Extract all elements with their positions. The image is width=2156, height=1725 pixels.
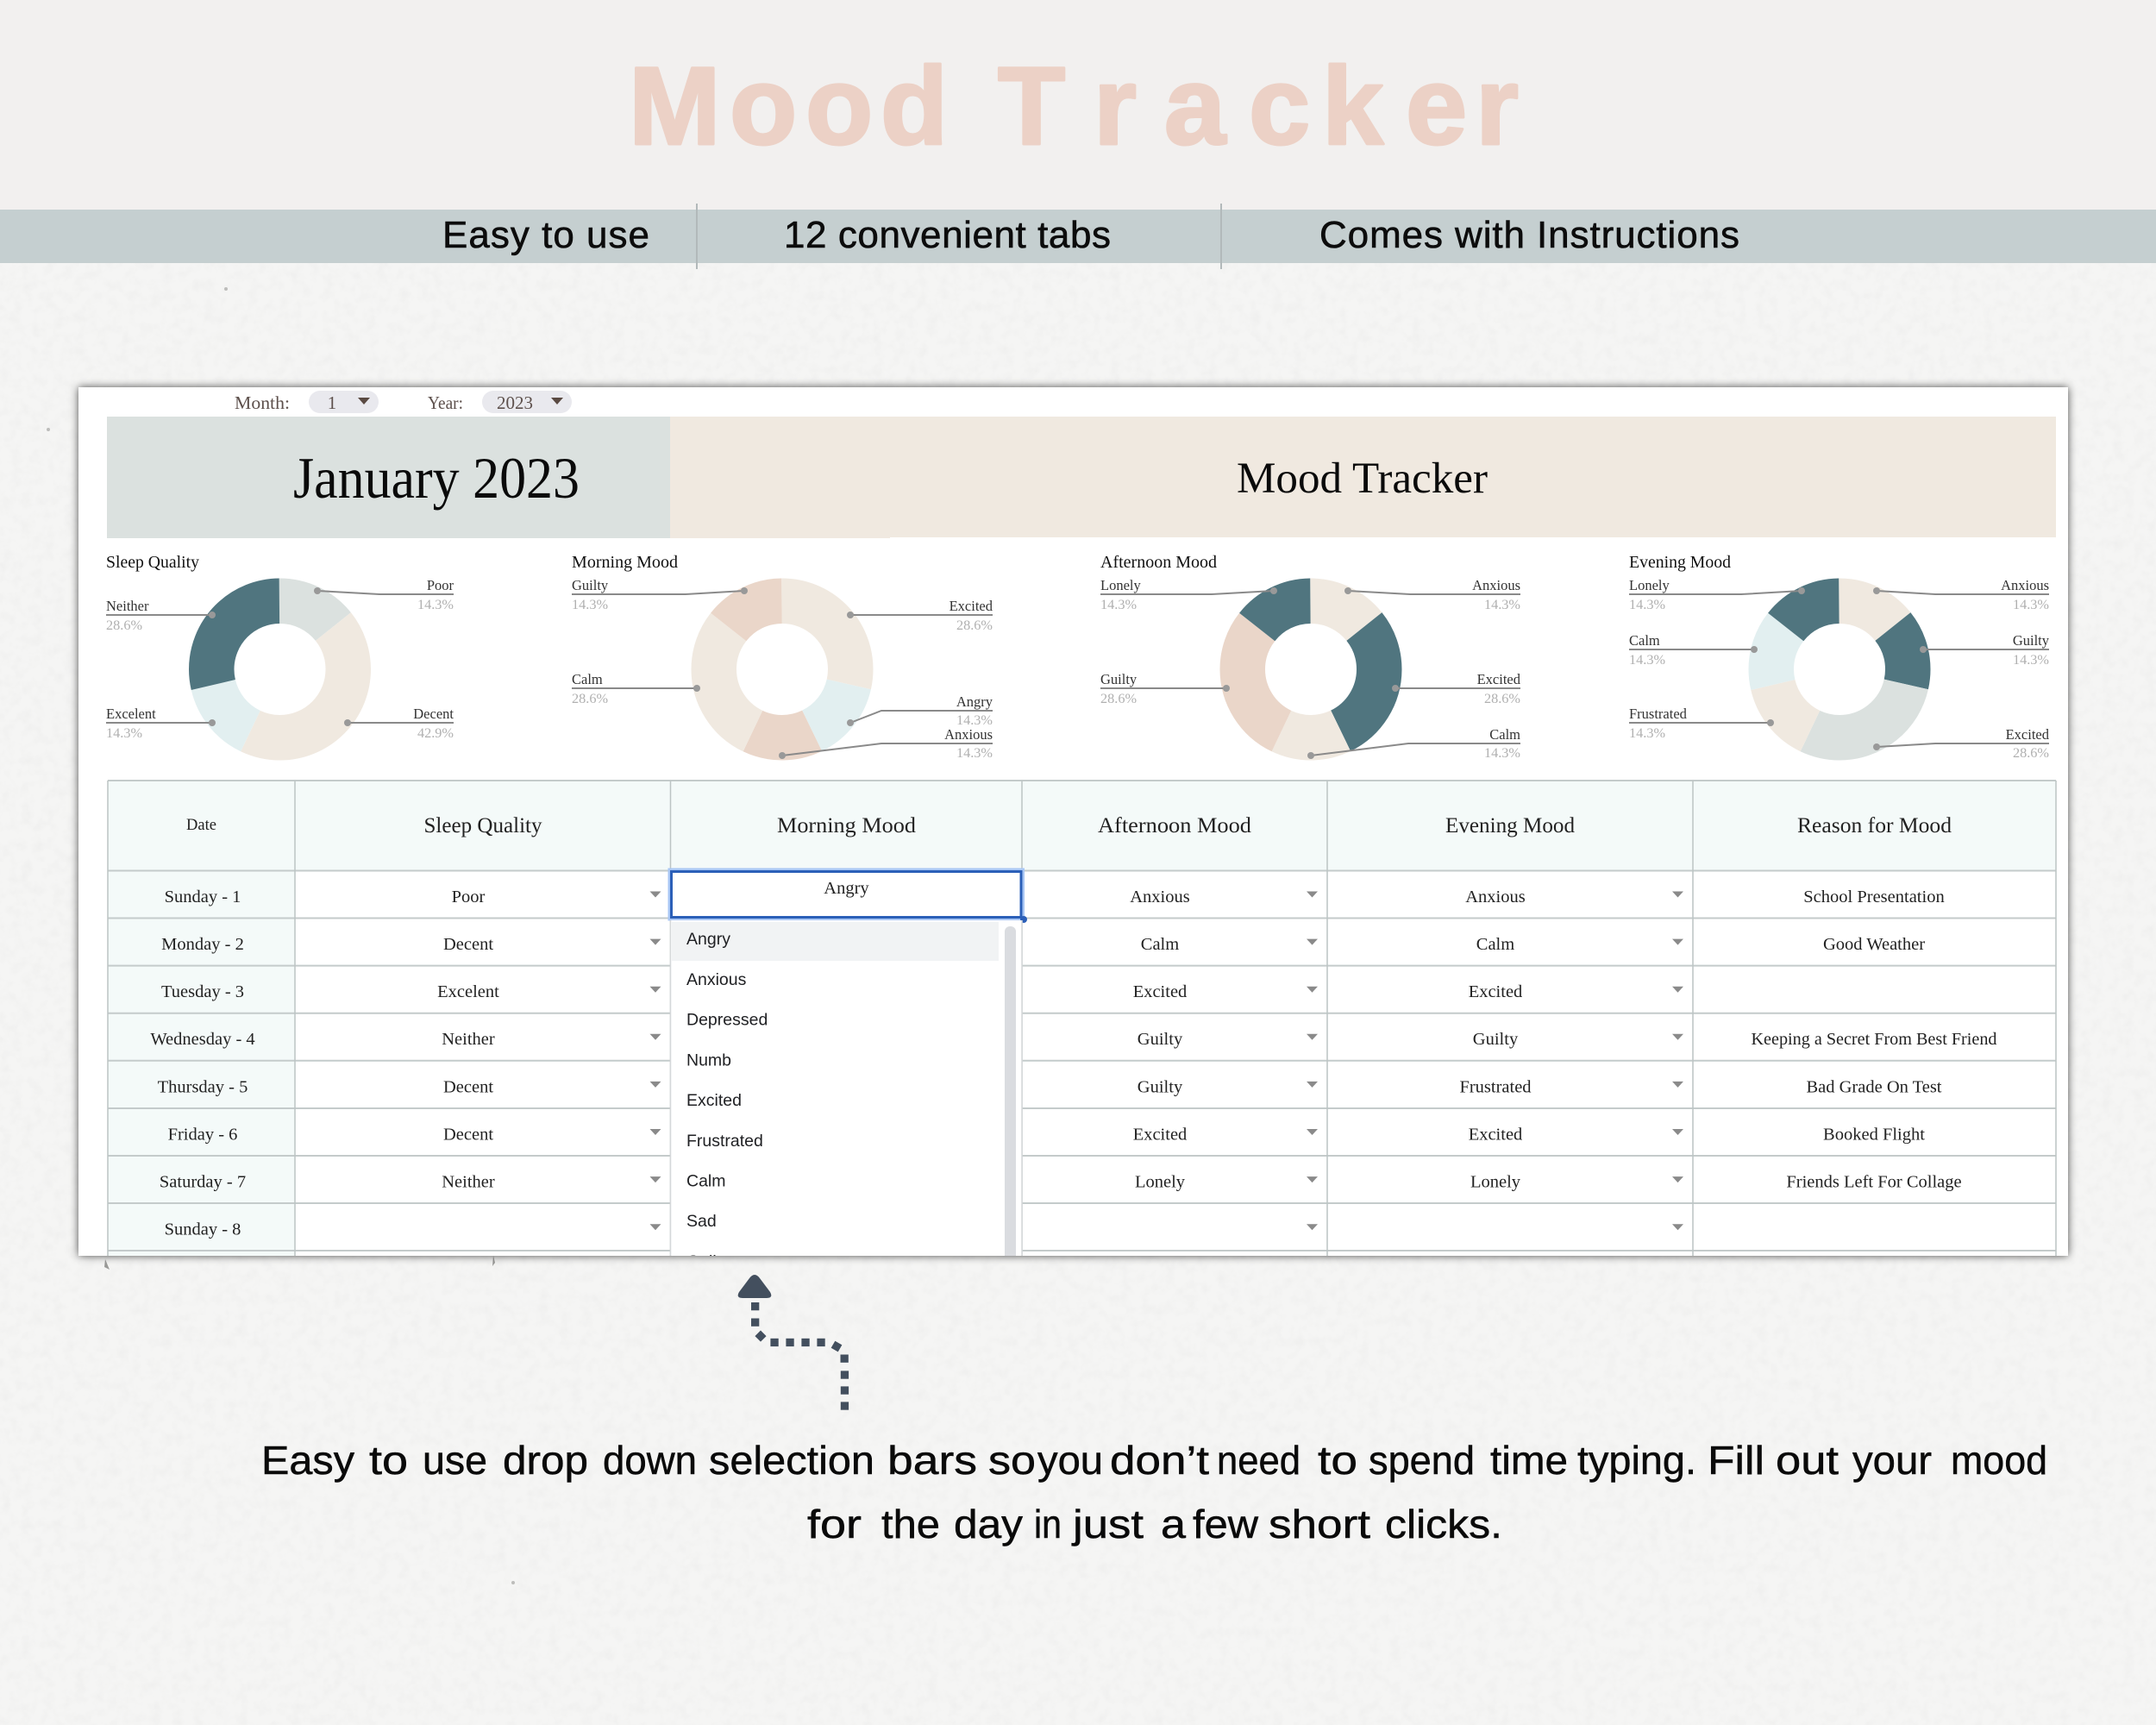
caption: the [881, 1502, 940, 1546]
caption: to [1318, 1438, 1357, 1483]
sleep quality column: Neither [442, 1173, 495, 1192]
month and year selectors: Year: [428, 392, 463, 413]
caption: need [1217, 1438, 1300, 1483]
dropdown options: Angry [686, 930, 730, 949]
highlighted option [672, 922, 999, 961]
label: Anxious [1344, 577, 1520, 612]
label: Anxious: 14.3% [2013, 596, 2049, 612]
date column [150, 888, 255, 1239]
date column: Monday - 2 [161, 935, 244, 954]
dropdown options: Sad [686, 1212, 717, 1231]
afternoon mood column: Excited [1133, 1125, 1187, 1144]
label: Anxious [1873, 577, 2049, 612]
caption: clicks. [1385, 1502, 1502, 1546]
caption: you [1037, 1438, 1103, 1483]
header background [0, 0, 2156, 210]
table header row: Date [186, 817, 216, 834]
label: Decent: Decent [413, 706, 454, 722]
label: Anxious: 14.3% [1484, 596, 1520, 612]
table grid [108, 781, 2056, 1256]
label: Guilty: Guilty [1100, 671, 1138, 687]
caption [261, 1438, 2047, 1546]
dropdown options: Anxious [686, 970, 747, 989]
chart: Sleep Quality [106, 553, 454, 741]
banner: January 2023: January 2023 [293, 445, 580, 511]
afternoon mood column: Lonely [1135, 1173, 1186, 1192]
caption: typing. [1577, 1438, 1696, 1483]
evening mood column: Guilty [1473, 1030, 1519, 1049]
month and year selectors [235, 391, 572, 413]
label: Calm [1307, 726, 1520, 761]
label: Calm: Calm [1629, 632, 1660, 649]
evening mood column: Calm [1476, 935, 1514, 954]
sleep quality column [437, 888, 661, 1230]
reason for mood column: Friends Left For Collage [1786, 1173, 1962, 1192]
scrollbar [1005, 926, 1016, 1263]
label: Excited: 28.6% [1484, 690, 1520, 706]
feature: easy to use: Easy to use [442, 214, 649, 256]
label: Lonely [1100, 577, 1277, 612]
reason for mood column: Keeping a Secret From Best Friend [1751, 1030, 1997, 1049]
label: Excited: 28.6% [956, 617, 993, 633]
label: Poor [314, 577, 454, 612]
dropdown options [686, 930, 768, 1271]
caption: Fill [1708, 1438, 1764, 1483]
label: Calm: Calm [572, 671, 603, 687]
banner: Mood Tracker [670, 417, 2056, 538]
label: Angry: Angry [956, 693, 993, 710]
caption: Easy [261, 1438, 354, 1483]
caption: down [603, 1438, 697, 1483]
feature: comes with instructions: Comes with Instructions [1319, 214, 1739, 256]
label: Excelent: 14.3% [106, 724, 142, 741]
evening mood column: Excited [1469, 982, 1522, 1001]
caption: day [954, 1502, 1023, 1546]
label: Anxious: Anxious [944, 726, 993, 743]
caption: drop [503, 1438, 588, 1483]
label: Anxious: Anxious [2001, 577, 2049, 593]
reason for mood column: Good Weather [1823, 935, 1925, 954]
feature band [0, 204, 2156, 269]
label: Calm [1629, 632, 1758, 668]
label: Frustrated [1629, 706, 1774, 741]
label: Lonely [1629, 577, 1805, 612]
donut: Sleep Quality [211, 601, 348, 737]
date column: Thursday - 5 [158, 1078, 248, 1097]
afternoon mood column: Calm [1141, 935, 1179, 954]
caption: just [1071, 1502, 1144, 1546]
caption: time [1490, 1438, 1568, 1483]
label: Angry [847, 693, 993, 728]
label: Calm: Calm [1489, 726, 1520, 743]
afternoon mood column [1130, 888, 1318, 1230]
table header row: Sleep Quality [424, 812, 542, 837]
caption: so [988, 1438, 1036, 1483]
reason for mood column: Bad Grade On Test [1806, 1078, 1942, 1097]
month and year selectors: 2023 [497, 392, 533, 413]
label: Excited: Excited [2006, 726, 2050, 743]
label: Excited: Excited [1477, 671, 1521, 687]
label: Guilty [1100, 671, 1230, 706]
caption: for [807, 1502, 862, 1546]
label: Excelent [106, 706, 216, 741]
sleep quality column: Decent [443, 1078, 493, 1097]
caption: selection [709, 1438, 874, 1483]
date column: Wednesday - 4 [150, 1030, 255, 1049]
evening mood column: Anxious [1465, 888, 1526, 906]
dropdown options: Depressed [686, 1011, 768, 1030]
label: Excited [1392, 671, 1521, 706]
title: Mood Tracker [629, 45, 1519, 168]
table header row: Reason for Mood [1797, 812, 1952, 837]
chart: Evening Mood: Evening Mood [1629, 553, 1731, 572]
dropdown options: Frustrated [686, 1132, 763, 1151]
dropdown menu [671, 920, 1022, 1271]
sleep quality column: Decent [443, 935, 493, 954]
table header row: Evening Mood [1445, 812, 1575, 837]
caption: mood [1951, 1438, 2047, 1483]
afternoon mood column: Guilty [1138, 1078, 1183, 1097]
selected cell: Angry [671, 871, 1027, 923]
date column: Tuesday - 3 [161, 982, 244, 1001]
label: Anxious: 14.3% [956, 744, 993, 761]
banner: January 2023 [107, 417, 670, 538]
panel: spreadsheet screenshot [78, 387, 2068, 1271]
chart: Afternoon Mood: Afternoon Mood [1100, 553, 1217, 572]
caption: use [423, 1438, 487, 1483]
sleep quality column: Neither [442, 1030, 495, 1049]
label: Guilty: 14.3% [2013, 651, 2049, 668]
caption: spend [1369, 1438, 1475, 1483]
table [108, 781, 2056, 1271]
label: Guilty: Guilty [572, 577, 609, 593]
label: Neither: Neither [106, 598, 149, 614]
date column: Friday - 6 [168, 1125, 237, 1144]
dropdown options: Calm [686, 1171, 726, 1190]
label: Anxious: Anxious [1472, 577, 1520, 593]
sleep quality column: Decent [443, 1125, 493, 1144]
label: Lonely: 14.3% [1629, 596, 1665, 612]
date column: Sunday - 8 [165, 1220, 241, 1239]
caption: bars [887, 1438, 977, 1483]
month and year selectors: 1 [328, 392, 336, 413]
label: Guilty: 28.6% [1100, 690, 1137, 706]
donut: Evening Mood [1771, 601, 1908, 737]
table header row: Morning Mood [777, 812, 916, 837]
selected cell: Angry: Angry [824, 879, 869, 898]
label: Excited: 28.6% [2013, 744, 2049, 761]
reason for mood column: School Presentation [1803, 888, 1945, 906]
table header row [186, 817, 1952, 837]
label: Poor: 14.3% [417, 596, 454, 612]
label: Frustrated: Frustrated [1629, 706, 1688, 722]
label: Guilty: Guilty [2013, 632, 2050, 649]
label: Calm [572, 671, 700, 706]
caption: in [1034, 1502, 1062, 1546]
afternoon mood column: Guilty [1138, 1030, 1183, 1049]
label: Angry: 14.3% [956, 712, 993, 728]
chart: Evening Mood [1629, 553, 2050, 761]
label: Frustrated: 14.3% [1629, 724, 1665, 741]
date column: Saturday - 7 [160, 1173, 246, 1192]
caption: to [369, 1438, 408, 1483]
label: Anxious [779, 726, 993, 761]
caption: out [1776, 1438, 1839, 1483]
afternoon mood column: Anxious [1130, 888, 1190, 906]
label: Neither [106, 598, 216, 633]
label: Lonely: Lonely [1100, 577, 1141, 593]
caption: a [1161, 1502, 1186, 1546]
reason for mood column [1751, 888, 1997, 1192]
label: Lonely: Lonely [1629, 577, 1670, 593]
label: Guilty [572, 577, 748, 612]
label: Lonely: 14.3% [1100, 596, 1137, 612]
sleep quality column: Poor [452, 888, 486, 906]
donut: Morning Mood [714, 601, 850, 737]
chart: Sleep Quality: Sleep Quality [106, 553, 199, 572]
dropdown options: Guilty [686, 1252, 730, 1271]
caption: few [1193, 1502, 1259, 1546]
label: Neither: 28.6% [106, 617, 142, 633]
label: Excited [1873, 726, 2050, 761]
evening mood column [1459, 888, 1683, 1230]
dropdown options: Excited [686, 1091, 742, 1110]
chart: Morning Mood [572, 553, 993, 761]
label: Calm: 28.6% [572, 690, 608, 706]
caption: short [1269, 1502, 1370, 1546]
table header row: Afternoon Mood [1098, 812, 1251, 837]
label: Excited [847, 598, 993, 633]
banner: Mood Tracker: Mood Tracker [1237, 455, 1488, 503]
label: Guilty [1920, 632, 2050, 668]
chart: Morning Mood: Morning Mood [572, 553, 678, 572]
afternoon mood column: Excited [1133, 982, 1187, 1001]
arrow pointing to dropdown [738, 1275, 849, 1410]
month and year selectors: Month: [235, 392, 290, 413]
caption: don’t [1110, 1438, 1209, 1483]
caption: your [1852, 1438, 1932, 1483]
reason for mood column: Booked Flight [1823, 1125, 1925, 1144]
evening mood column: Excited [1469, 1125, 1522, 1144]
label: Excited: Excited [950, 598, 993, 614]
label: Decent: 42.9% [417, 724, 454, 741]
feature: 12 convenient tabs: 12 convenient tabs [784, 214, 1111, 256]
evening mood column: Frustrated [1459, 1078, 1532, 1097]
label: Excelent: Excelent [106, 706, 156, 722]
evening mood column: Lonely [1470, 1173, 1521, 1192]
date column: Sunday - 1 [165, 888, 241, 906]
sleep quality column: Excelent [437, 982, 499, 1001]
label: Decent [344, 706, 454, 741]
donut: Afternoon Mood [1243, 601, 1379, 737]
dropdown options: Numb [686, 1051, 731, 1070]
label: Calm: 14.3% [1629, 651, 1665, 668]
label: Calm: 14.3% [1484, 744, 1520, 761]
chart: Afternoon Mood [1100, 553, 1521, 761]
label: Guilty: 14.3% [572, 596, 608, 612]
label: Poor: Poor [427, 577, 454, 593]
